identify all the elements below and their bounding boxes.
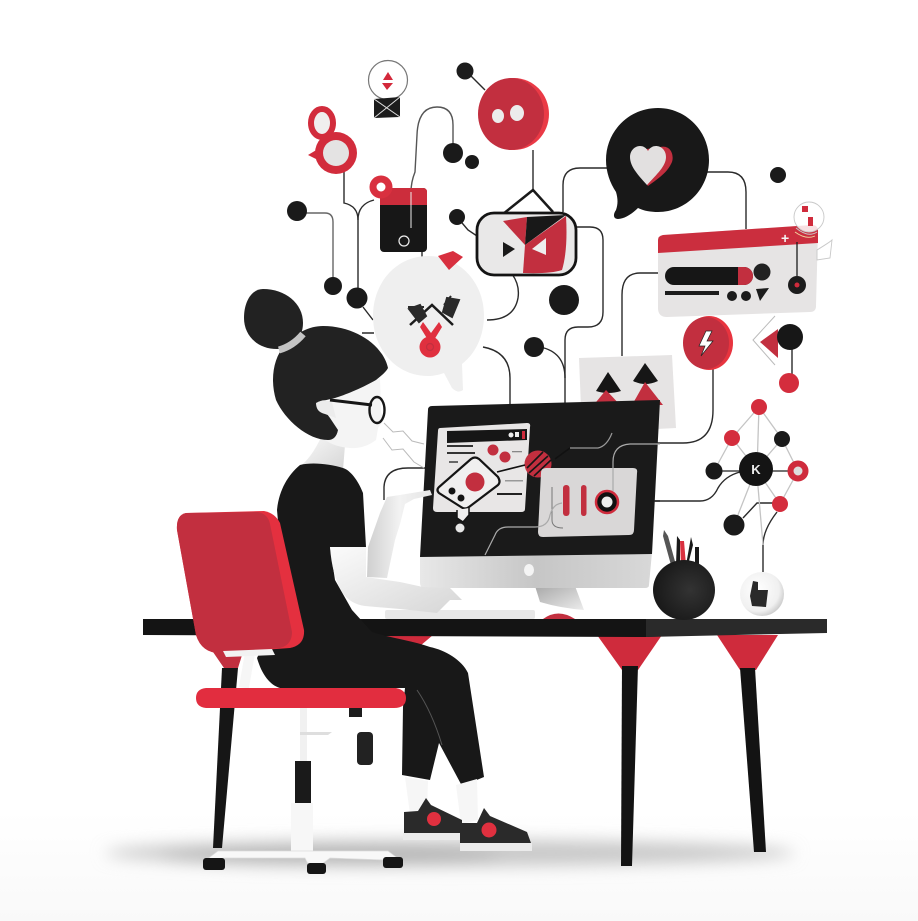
panel: red header interface card: + <box>781 230 789 246</box>
icon: apple logo <box>524 564 534 576</box>
small black dots <box>287 143 786 357</box>
pencil pot <box>653 530 715 620</box>
raised forearm <box>367 490 432 578</box>
clothing: t-shirt and trousers <box>257 464 484 786</box>
icon: black dot top <box>456 62 474 80</box>
red chair seat <box>196 688 406 708</box>
icon: red and black folder tag <box>373 179 427 252</box>
right shoe <box>460 808 532 851</box>
hair bun <box>244 289 303 349</box>
icon: triangles card <box>579 355 676 433</box>
mouse <box>543 614 575 619</box>
keyboard <box>385 610 535 619</box>
left shoe <box>403 798 462 840</box>
wires from face to screen <box>383 423 424 468</box>
desk <box>143 619 827 866</box>
desk items <box>385 530 784 620</box>
icon: envelope badge <box>368 60 408 118</box>
icon: video play badge <box>477 190 576 275</box>
desk leg front <box>597 635 662 866</box>
thumbs-up ball <box>740 572 784 616</box>
monitor <box>420 400 660 610</box>
desk leg rear <box>717 635 778 852</box>
screen: diamond speech tag <box>438 458 500 532</box>
trouser crease <box>417 690 442 745</box>
floor shadow <box>105 840 795 866</box>
arm and hand <box>330 547 462 613</box>
ear <box>316 400 336 418</box>
icon: red lightning disc <box>683 316 733 370</box>
screen: striped red ball <box>497 433 612 498</box>
icon: speech bubble with crossed arrows medal <box>373 251 484 392</box>
screen: audio control panel <box>485 444 660 555</box>
person <box>244 289 532 851</box>
chair frame and base <box>203 654 403 874</box>
hair band <box>279 334 303 350</box>
desk left bracket <box>385 635 433 646</box>
screen: browser window <box>433 423 530 512</box>
socks <box>405 777 478 824</box>
hair <box>273 326 388 440</box>
face <box>325 378 384 448</box>
glasses <box>330 397 384 423</box>
icon: red ring glasses <box>308 109 357 174</box>
icon: black speech bubble with heart <box>606 108 709 219</box>
network diagram: K <box>751 462 761 477</box>
network diagram <box>706 399 806 545</box>
neck <box>298 435 345 470</box>
connector lines <box>306 71 792 572</box>
red chair back <box>177 511 304 668</box>
icon: red quote disc <box>478 78 549 150</box>
icon: diamond tag with dots <box>753 316 803 393</box>
icon: sketch hand corner <box>794 202 832 260</box>
panel: red header interface card <box>658 225 818 317</box>
